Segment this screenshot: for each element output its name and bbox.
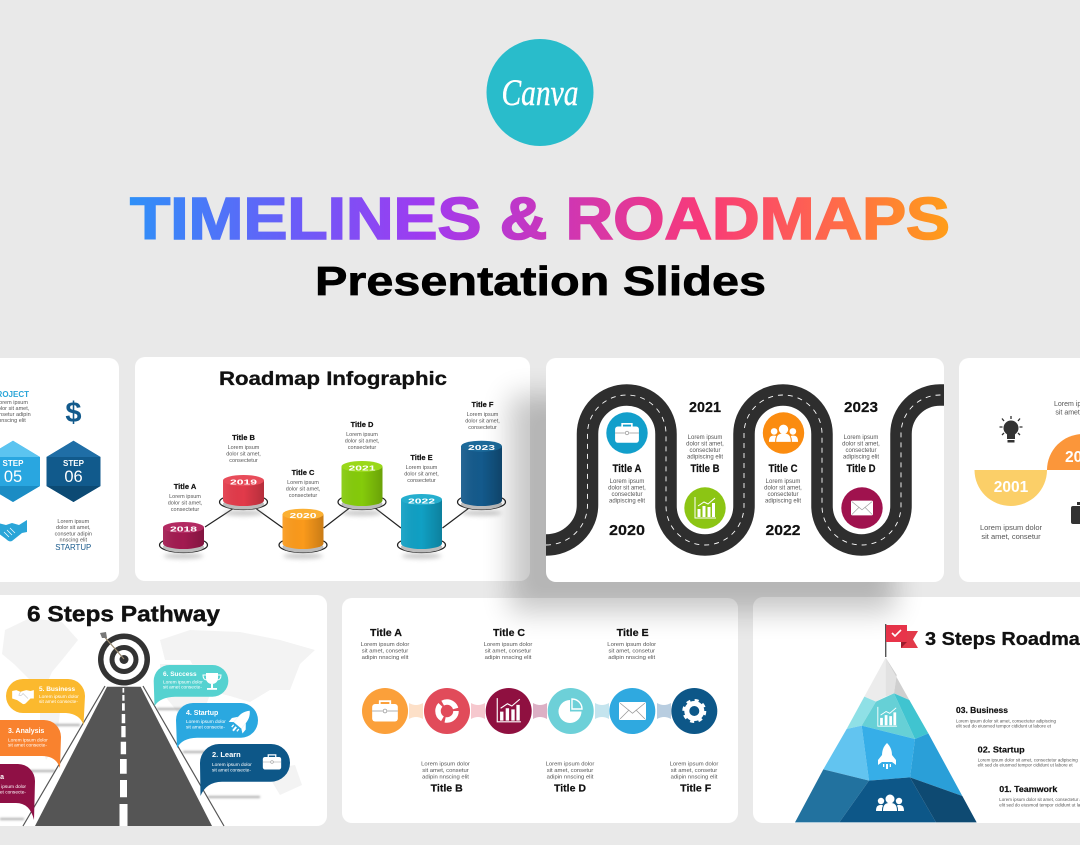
text: title A — [361, 627, 409, 661]
label: title F: Title F — [472, 400, 494, 409]
label: title E: Title E — [410, 453, 433, 462]
icon: briefcase — [263, 755, 281, 770]
icon: handshake — [12, 690, 34, 704]
bubble: 2 learn: Lorem ipsum dolor — [212, 762, 252, 768]
mountain — [795, 658, 977, 822]
text: title A: sit amet, consetur — [362, 648, 408, 654]
label: title B: consectetur — [229, 458, 258, 464]
text: 01 teamwork: 01. Teamwork — [999, 784, 1058, 794]
text: title C: Title C — [493, 627, 525, 639]
label: title C: Title C — [292, 468, 315, 477]
cylinder 2020 — [279, 509, 327, 559]
panel: 3 steps roadmap — [753, 597, 1080, 823]
text: title B: Title B — [690, 463, 720, 475]
text: title F: Title F — [680, 783, 712, 795]
text: title E: Title E — [617, 627, 649, 639]
world map — [2, 618, 315, 795]
text: title D: adipiscing elit — [843, 454, 879, 460]
cylinder 2022: 2022 — [408, 498, 435, 506]
label: title F: Lorem ipsum — [467, 412, 499, 418]
text: 02 startup: elit sed do eiusmod tempor cididunt ut labore et — [978, 763, 1073, 768]
text: 02 startup: Lorem ipsum dolor sit amet, consectetur adipiscing — [978, 758, 1078, 762]
project lorem — [0, 400, 31, 424]
step 05 hexagon: STEP — [3, 459, 24, 468]
startup lorem — [55, 519, 92, 544]
panel: steps slide — [0, 358, 119, 582]
text: title F: sit amet, consetur — [671, 768, 717, 774]
text: title A: adipin nnscing elit — [362, 655, 409, 661]
text: title C — [764, 463, 802, 504]
panel: year waves slide — [959, 358, 1080, 582]
label: title A: consectetur — [171, 507, 199, 513]
label: title F — [465, 400, 500, 431]
text: title D: Lorem ipsum dolor — [546, 762, 594, 768]
text: title C: Lorem ipsum — [766, 479, 800, 485]
circle: mail — [841, 487, 883, 529]
shadow beneath winding road slide — [510, 395, 895, 612]
startup lorem: nnscing elit — [60, 538, 88, 544]
heading: 6 Steps Pathway — [27, 602, 221, 627]
text: title B: Lorem ipsum — [688, 435, 722, 441]
text: 03 business: 03. Business — [956, 705, 1008, 715]
bubble: 2 learn: sit amet consecte- — [212, 768, 251, 774]
label: title A: dolor sit amet, — [168, 500, 203, 506]
label: title B: dolor sit amet, — [226, 452, 261, 458]
year 2023: 2023 — [844, 400, 878, 416]
cylinder 2019: 2019 — [230, 480, 257, 486]
text: title D — [842, 435, 880, 475]
step 06 hexagon: 06 — [64, 468, 83, 486]
text: title D: Title D — [554, 783, 586, 795]
subtitle: Presentation Slides — [315, 258, 766, 304]
cylinder 2021: 2021 — [348, 466, 376, 472]
text: title D: adipin nnscing elit — [547, 774, 594, 780]
text: 03 business — [956, 705, 1056, 728]
panel: six icons timeline — [342, 598, 738, 823]
icon: rocket — [226, 705, 257, 737]
startup lorem: Lorem ipsum — [57, 519, 90, 525]
bubble: 4 startup: Lorem ipsum dolor — [186, 719, 226, 725]
bubble: 5 business — [6, 679, 85, 725]
circle: chart — [684, 487, 726, 529]
bottom lorem text: Lorem ipsum dolor — [980, 523, 1043, 532]
text: title B: consectetur — [689, 448, 721, 454]
bubble: 2 learn — [200, 744, 290, 796]
bubble: 4 startup — [176, 703, 258, 748]
circle: briefcase — [606, 412, 648, 454]
text: title D — [546, 762, 594, 795]
label: title A: Lorem ipsum — [169, 494, 201, 500]
label: title C: Lorem ipsum — [287, 480, 319, 486]
Canva logo — [486, 39, 594, 146]
text: title C: dolor sit amet, — [764, 486, 802, 492]
step circle: mail — [609, 688, 655, 734]
bubble: 6 success: Lorem ipsum dolor — [163, 680, 203, 686]
bubble: 1 idea — [0, 764, 35, 820]
cylinder 2021 — [338, 461, 386, 516]
heading: 3 Steps Roadmap — [925, 628, 1080, 649]
label: title C — [286, 468, 321, 499]
text: 03 business: elit sed do eiusmod tempor cididunt ut labore et — [956, 724, 1052, 728]
step circle: gear — [671, 688, 717, 734]
text: title B: Lorem ipsum dolor — [421, 762, 470, 768]
text: title E: adipin nnscing elit — [608, 655, 655, 661]
top lorem text — [1054, 401, 1080, 416]
label: title B — [226, 433, 261, 464]
connectors — [409, 703, 671, 719]
bubble: 4 startup: sit amet consecte- — [186, 724, 225, 730]
circle: people — [763, 412, 804, 454]
label: title F: dolor sit amet, — [465, 418, 500, 424]
text: title A: Title A — [370, 627, 402, 639]
cylinder 2023 — [458, 441, 506, 516]
text: title A — [608, 463, 646, 504]
yellow half circle 2001 — [974, 470, 1047, 506]
year 2021: 2021 — [689, 400, 721, 416]
step circle: chart — [486, 688, 532, 734]
bubble: 5 business: Lorem ipsum dolor — [39, 694, 79, 700]
bottom lorem text: sit amet, consetur — [981, 532, 1041, 541]
icon: mountain people — [876, 794, 904, 811]
text: title B: sit amet, consetur — [422, 768, 469, 774]
text: title A: dolor sit amet, — [608, 486, 646, 492]
panel: winding road timeline — [546, 358, 944, 582]
text: title C: Title C — [768, 463, 798, 475]
icon: dark briefcase — [1071, 502, 1080, 524]
icon: dollar: $ — [65, 397, 82, 429]
text: title A: consectetur — [611, 492, 643, 498]
cylinder 2022 — [398, 494, 446, 559]
label: title B: Title B — [232, 433, 255, 442]
icon: mountain chart — [878, 707, 897, 726]
label: title A — [168, 482, 203, 513]
text: 03 business: Lorem ipsum dolor sit amet, consectetur adipiscing — [956, 718, 1056, 724]
text: title F: adipin nnscing elit — [671, 774, 718, 780]
connector lines — [205, 508, 469, 528]
text: title B — [421, 762, 470, 795]
icon: handshake — [0, 520, 27, 541]
yellow half circle 2001: 2001 — [994, 479, 1029, 496]
text: title B: adipiscing elit — [687, 454, 723, 460]
text: title F: Lorem ipsum dolor — [670, 762, 718, 768]
icon: flag — [885, 624, 918, 657]
step circle: cycle — [424, 688, 470, 734]
text: title B: adipin nnscing elit — [422, 774, 469, 780]
label: title D: dolor sit amet, — [345, 438, 380, 444]
Canva logo: Canva — [502, 73, 578, 114]
step 05 hexagon — [0, 441, 40, 502]
bottom lorem text — [980, 523, 1043, 541]
bubble: 6 success: sit amet consecte- — [163, 684, 202, 690]
text: title D: dolor sit amet, — [842, 442, 880, 448]
bubble: 4 startup: 4. Startup — [186, 710, 218, 717]
bubble: 3 analysis: Lorem ipsum dolor — [8, 738, 48, 744]
text: title C — [484, 627, 532, 661]
step 05 hexagon: 05 — [4, 468, 22, 486]
text: title E — [607, 627, 656, 661]
label: title E — [404, 453, 439, 484]
label: title B: Lorem ipsum — [228, 445, 260, 451]
label: title E: consectetur — [407, 478, 436, 484]
year 2022: 2022 — [766, 523, 800, 539]
title: TIMELINES & ROADMAPS — [130, 186, 950, 252]
bubble shadows — [0, 708, 260, 820]
bubble: 3 analysis: sit amet consecte- — [8, 742, 47, 748]
text: title C: adipin nnscing elit — [485, 655, 532, 661]
bubble: 3 analysis: 3. Analysis — [8, 728, 44, 735]
text: title B: Title B — [431, 783, 463, 795]
label: title D: Title D — [351, 420, 374, 429]
text: title F — [670, 762, 718, 795]
panel: 6 steps pathway — [0, 595, 327, 826]
text: 01 teamwork — [999, 784, 1080, 808]
label: title E: Lorem ipsum — [406, 465, 438, 471]
label: title C: consectetur — [289, 493, 317, 499]
label: title E: dolor sit amet, — [404, 472, 439, 478]
cylinder 2018 — [160, 522, 208, 559]
icon: mountain rocket — [878, 743, 896, 769]
bubble: 6 success: 6. Success — [163, 671, 197, 678]
step 06 hexagon — [46, 441, 100, 502]
cylinder 2019 — [220, 475, 268, 516]
bubble: 2 learn: 2. Learn — [212, 750, 241, 759]
text: title B: dolor sit amet, — [686, 442, 724, 448]
panel: roadmap infographic — [135, 357, 530, 581]
road — [23, 686, 224, 826]
text: title A: Lorem ipsum dolor — [361, 642, 409, 648]
text: title B — [686, 435, 724, 475]
year 2020: 2020 — [609, 523, 645, 539]
cylinder 2023: 2023 — [468, 445, 495, 452]
startup lorem: consetur adipin — [55, 532, 92, 538]
text: title A: adipiscing elit — [609, 498, 645, 504]
text: title D: consectetur — [845, 448, 877, 454]
label: title F: consectetur — [468, 425, 497, 431]
label: title D — [345, 420, 380, 451]
label: title C: dolor sit amet, — [286, 486, 321, 492]
roadmap heading: Roadmap Infographic — [219, 368, 447, 390]
target with arrow — [98, 632, 150, 686]
icon: light bulb — [1000, 416, 1022, 442]
label: title D: consectetur — [348, 445, 376, 451]
startup label: STARTUP — [55, 543, 91, 552]
orange half circle — [1047, 434, 1080, 470]
text: title C: adipiscing elit — [765, 498, 801, 504]
icon: trophy — [203, 673, 221, 690]
text: title C: consectetur — [767, 492, 799, 498]
step circle: briefcase — [362, 688, 408, 734]
text: title E: Lorem ipsum dolor — [607, 642, 656, 648]
text: title A: Lorem ipsum — [610, 479, 644, 485]
bubble: 5 business: sit amet consecte- — [39, 699, 78, 705]
text: title E: sit amet, consetur — [608, 648, 655, 654]
step circle: pie — [548, 688, 594, 734]
text: title D: Title D — [846, 463, 876, 475]
text: title C: sit amet, consetur — [485, 648, 531, 654]
step 06 hexagon: STEP — [63, 459, 85, 468]
text: title D: sit amet, consetur — [547, 768, 593, 774]
road — [546, 395, 944, 545]
startup lorem: dolor sit amet, — [56, 525, 91, 531]
text: 02 startup: 02. Startup — [978, 745, 1025, 755]
bubble: 5 business: 5. Business — [39, 686, 76, 693]
text: 02 startup — [978, 745, 1078, 768]
text: title A: Title A — [612, 463, 642, 475]
bubble: 3 analysis — [0, 720, 61, 768]
bubble: 6 success — [154, 665, 228, 706]
label: title A: Title A — [174, 482, 197, 491]
text: title C: Lorem ipsum dolor — [484, 642, 532, 648]
text: title D: Lorem ipsum — [844, 435, 878, 441]
cylinder 2020: 2020 — [290, 513, 317, 520]
cylinder 2018: 2018 — [170, 526, 197, 534]
label: title D: Lorem ipsum — [346, 432, 378, 438]
